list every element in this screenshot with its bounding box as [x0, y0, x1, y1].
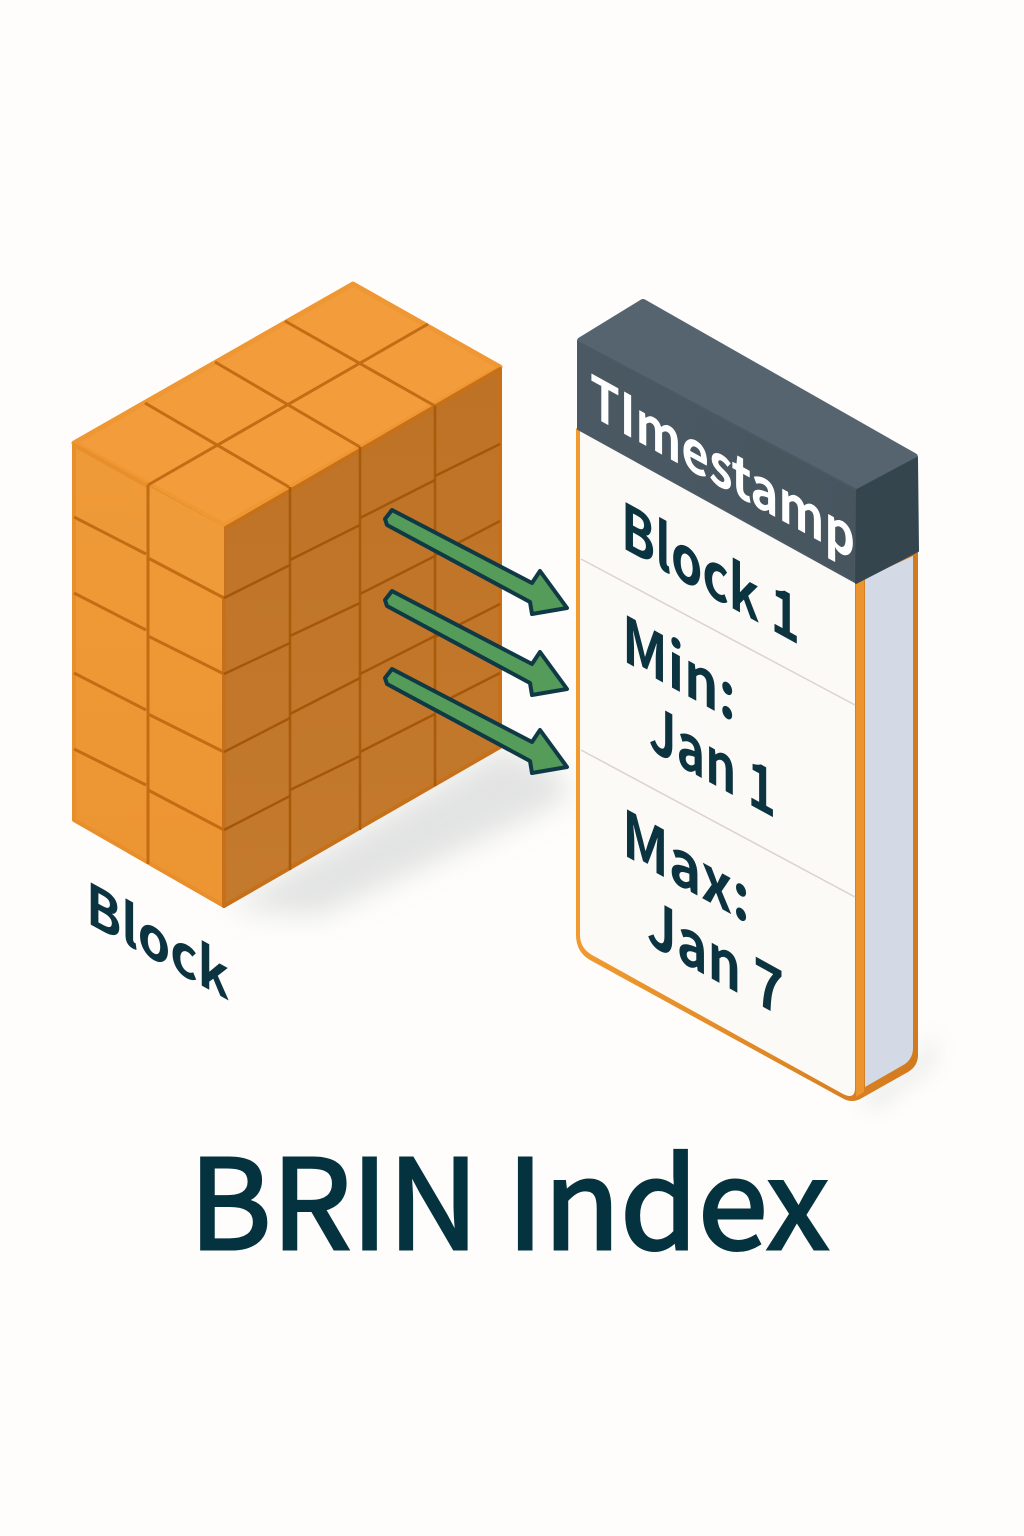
- row text: max: Max:: [622, 779, 750, 943]
- header text: TImestamp: [590, 349, 855, 578]
- block: front top cube: [150, 487, 224, 596]
- panel: header front: [578, 342, 857, 582]
- panel: front face: [580, 426, 855, 1096]
- row text: min: Min:: [622, 585, 736, 741]
- panel shadow: [860, 1030, 935, 1110]
- index panel: [576, 303, 918, 1101]
- orange block stack: [74, 284, 500, 906]
- panel: row dividers: [581, 559, 855, 897]
- arrow 2: [385, 591, 567, 695]
- arrow 3: [385, 669, 567, 773]
- title: BRIN Index: [189, 1105, 829, 1285]
- row text: jan 1: Jan 1: [649, 674, 776, 837]
- block: grid lines: [74, 321, 435, 864]
- panel: orange frame: [576, 428, 918, 1101]
- block shadow: [226, 748, 565, 915]
- block: left face: [74, 445, 224, 906]
- panel: header top: [581, 303, 914, 488]
- panel: side strip: [856, 579, 864, 1097]
- block: right face: [224, 369, 500, 906]
- block label: Block: [86, 856, 229, 1017]
- row text: jan 7: Jan 7: [647, 868, 784, 1037]
- block: right face column lines: [290, 406, 435, 870]
- row text: block 1: Block 1: [621, 472, 800, 664]
- panel: side face: [865, 556, 913, 1087]
- panel: header side: [856, 458, 918, 583]
- block: right face row lines: [224, 444, 500, 830]
- block: top face: [74, 284, 500, 525]
- arrow 1: [385, 510, 567, 614]
